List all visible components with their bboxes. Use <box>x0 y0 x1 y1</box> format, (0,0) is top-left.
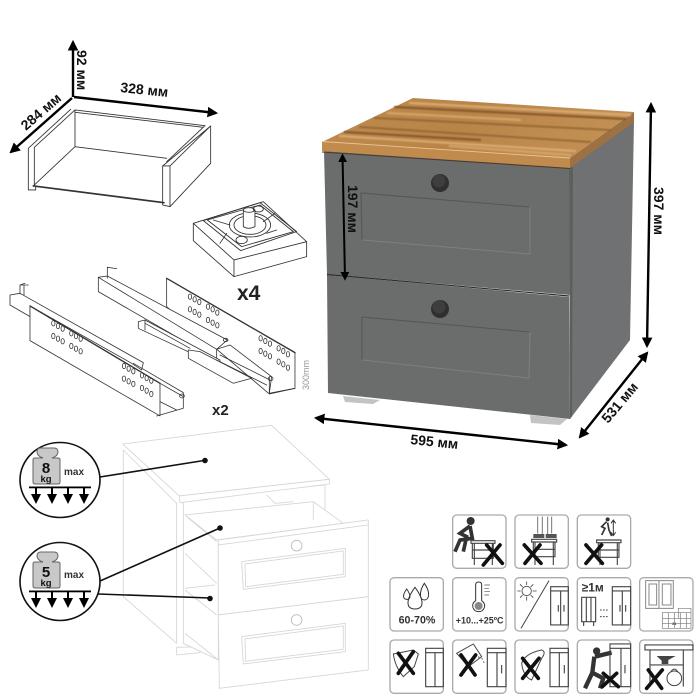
label: 284 mm: 284 мм <box>17 90 64 133</box>
icon: do not sit on top <box>453 515 506 568</box>
cabinet body <box>123 425 343 660</box>
shadow strip between front and side <box>569 167 573 419</box>
label: 531 mm: 531 мм <box>598 379 641 426</box>
icon: no liquids on surface <box>390 640 443 693</box>
side panel <box>569 120 634 419</box>
label: 328 mm: 328 мм <box>120 79 169 100</box>
label: x4: x4 <box>237 282 261 305</box>
label: 397 mm: 397 мм <box>651 187 667 235</box>
wooden top <box>322 98 634 168</box>
label: 197 mm: 197 мм <box>345 185 361 233</box>
lower drawer front <box>327 274 570 419</box>
leader line to top <box>100 458 208 477</box>
icon: do not jump on top <box>577 515 631 568</box>
circle badge <box>20 442 100 518</box>
left rail <box>10 283 184 416</box>
upper drawer front <box>218 520 368 615</box>
label: max: max <box>64 570 84 581</box>
right rail <box>98 267 295 394</box>
icon: do not push <box>577 640 631 693</box>
lower drawer front <box>218 597 368 688</box>
label: 92 mm: 92 мм <box>74 50 90 90</box>
feet <box>343 396 567 425</box>
callout: top load 8 kg max <box>20 442 208 518</box>
arrow: drawer width <box>74 97 216 113</box>
circle badge <box>20 542 100 620</box>
weight icon: kg <box>40 474 52 485</box>
weight icon: 5 <box>42 564 50 581</box>
drawer box with dimensions <box>11 42 216 207</box>
arrow: drawer height <box>72 42 74 97</box>
icon: no heavy items inside <box>640 640 693 693</box>
down arrows <box>29 590 91 608</box>
callout: drawer load 5 kg max <box>20 525 223 620</box>
icon: no abrasives <box>453 640 506 693</box>
icon: keep 1 m from heaters: ≥1м <box>582 581 604 595</box>
weight icon: kg <box>40 578 52 589</box>
open nightstand line drawing <box>123 425 368 688</box>
weight icon <box>33 552 60 589</box>
drawer slide rails with x2 count <box>10 267 311 419</box>
leg base <box>193 202 307 277</box>
weight icon: 8 <box>42 460 50 477</box>
upper drawer front <box>324 151 570 295</box>
icon: keep 1 m from heaters <box>577 578 631 631</box>
arrow: total height <box>647 104 651 346</box>
arrow: drawer depth <box>11 98 72 152</box>
arrow: total depth <box>580 353 647 437</box>
down arrows <box>29 486 91 504</box>
icon: room window and floor <box>640 578 693 631</box>
icon: avoid direct sunlight <box>515 578 568 631</box>
label: max: max <box>64 467 84 478</box>
icon: do not stand on top <box>515 515 568 568</box>
icon: no brushing <box>515 640 568 693</box>
icon: temperature range: +10...+25ºC <box>456 615 504 625</box>
icon: humidity 60-70% <box>390 578 443 631</box>
arrow: total width <box>316 418 566 445</box>
weight icon <box>33 448 60 485</box>
drawer box line drawing <box>28 109 211 207</box>
label: 300mm: 300mm <box>301 360 311 390</box>
icon: temperature range <box>453 578 506 631</box>
icon: room window and floor: 21 <box>672 621 677 626</box>
arrow: drawer front height <box>342 155 345 279</box>
label: x2: x2 <box>212 402 229 419</box>
icon: furniture leg with x4 count <box>193 202 307 305</box>
icon: humidity 60-70%: 60-70% <box>399 615 436 627</box>
nightstand photo <box>316 98 667 452</box>
care icon grid <box>390 515 693 693</box>
leader lines to drawers <box>98 525 223 601</box>
label: 595 mm: 595 мм <box>410 431 459 452</box>
